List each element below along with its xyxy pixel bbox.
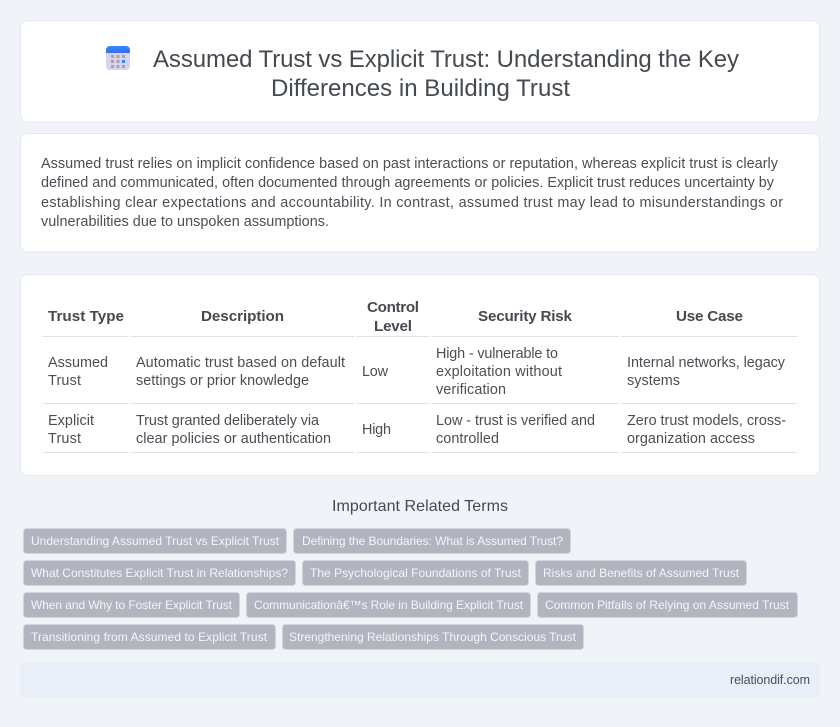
table row: explicit trust: High bbox=[362, 422, 391, 438]
text block: summary: vulnerabilities due to unspoken assumptions. bbox=[41, 214, 329, 230]
table row: explicit trust bbox=[48, 413, 786, 447]
table header: Use Case bbox=[676, 308, 743, 325]
table row: explicit trust: organization access bbox=[627, 431, 755, 447]
table row: explicit trust: Explicit bbox=[48, 413, 94, 429]
heading: important related terms: Important Related Terms bbox=[332, 498, 508, 515]
table row: explicit trust: controlled bbox=[436, 431, 499, 447]
tag list: related terms: What Constitutes Explicit Trust in Relationships? bbox=[31, 566, 288, 580]
text block: summary: defined and communicated, often documented through agreements or policies. Explicit trust reduces uncertainty by bbox=[41, 175, 775, 191]
table header: Security Risk bbox=[478, 308, 573, 325]
text block: summary bbox=[41, 156, 783, 230]
tag list: related terms: When and Why to Foster Explicit Trust bbox=[31, 598, 233, 612]
table row: assumed trust bbox=[48, 346, 786, 398]
table row: assumed trust: exploitation without bbox=[436, 364, 562, 380]
table row: assumed trust: High - vulnerable to bbox=[436, 346, 558, 362]
table header: Level bbox=[374, 318, 412, 335]
table row: assumed trust: Internal networks, legacy bbox=[627, 355, 786, 371]
text block: summary: establishing clear expectations and accountability. In contrast, assumed trust may lead to misunderstandings or bbox=[41, 195, 783, 211]
table row: assumed trust: verification bbox=[436, 382, 506, 398]
table row: assumed trust: Assumed bbox=[48, 355, 108, 371]
tag list: related terms: Transitioning from Assumed to Explicit Trust bbox=[31, 630, 268, 644]
tag list: related terms: The Psychological Foundations of Trust bbox=[310, 566, 522, 580]
tag list: related terms: Strengthening Relationships Through Conscious Trust bbox=[289, 630, 577, 644]
table row: assumed trust: systems bbox=[627, 373, 680, 389]
tag list: related terms: Communicationâ€™s Role in Building Explicit Trust bbox=[254, 598, 524, 612]
icon: calendar bbox=[106, 46, 130, 70]
tag list: related terms: Defining the Boundaries: What is Assumed Trust? bbox=[302, 534, 563, 548]
table header: Description bbox=[201, 308, 284, 325]
tag list: related terms: Risks and Benefits of Assumed Trust bbox=[543, 566, 740, 580]
table row: explicit trust: Zero trust models, cross- bbox=[627, 413, 786, 429]
footer: relationdif.com bbox=[730, 673, 810, 687]
table row: assumed trust: settings or prior knowledge bbox=[136, 373, 309, 389]
table row: explicit trust: Trust granted deliberately via bbox=[136, 413, 319, 429]
table header: Control bbox=[367, 299, 419, 316]
table header bbox=[48, 299, 743, 335]
tag list: related terms bbox=[24, 528, 798, 650]
tag list: related terms: Understanding Assumed Trust vs Explicit Trust bbox=[31, 534, 280, 548]
tag list: related terms: Common Pitfalls of Relying on Assumed Trust bbox=[545, 598, 790, 612]
table row: explicit trust: clear policies or authentication bbox=[136, 431, 331, 447]
table row: assumed trust: Automatic trust based on default bbox=[136, 355, 345, 371]
title: Assumed Trust vs Explicit Trust: Understanding the Key bbox=[153, 46, 739, 73]
table row: explicit trust: Low - trust is verified and bbox=[436, 413, 595, 429]
footer bbox=[20, 663, 820, 697]
table header: Trust Type bbox=[48, 308, 124, 325]
title bbox=[153, 46, 739, 102]
title: Differences in Building Trust bbox=[271, 75, 570, 102]
panel: comparison table bbox=[20, 274, 820, 476]
panel: summary paragraph bbox=[20, 134, 820, 252]
table row: assumed trust: Low bbox=[362, 364, 389, 380]
text block: summary: Assumed trust relies on implicit confidence based on past interactions or reputation, whereas explicit trust is clearly bbox=[41, 156, 779, 172]
table row: explicit trust: Trust bbox=[48, 431, 81, 447]
table row: assumed trust: Trust bbox=[48, 373, 81, 389]
panel: header bbox=[20, 20, 820, 122]
